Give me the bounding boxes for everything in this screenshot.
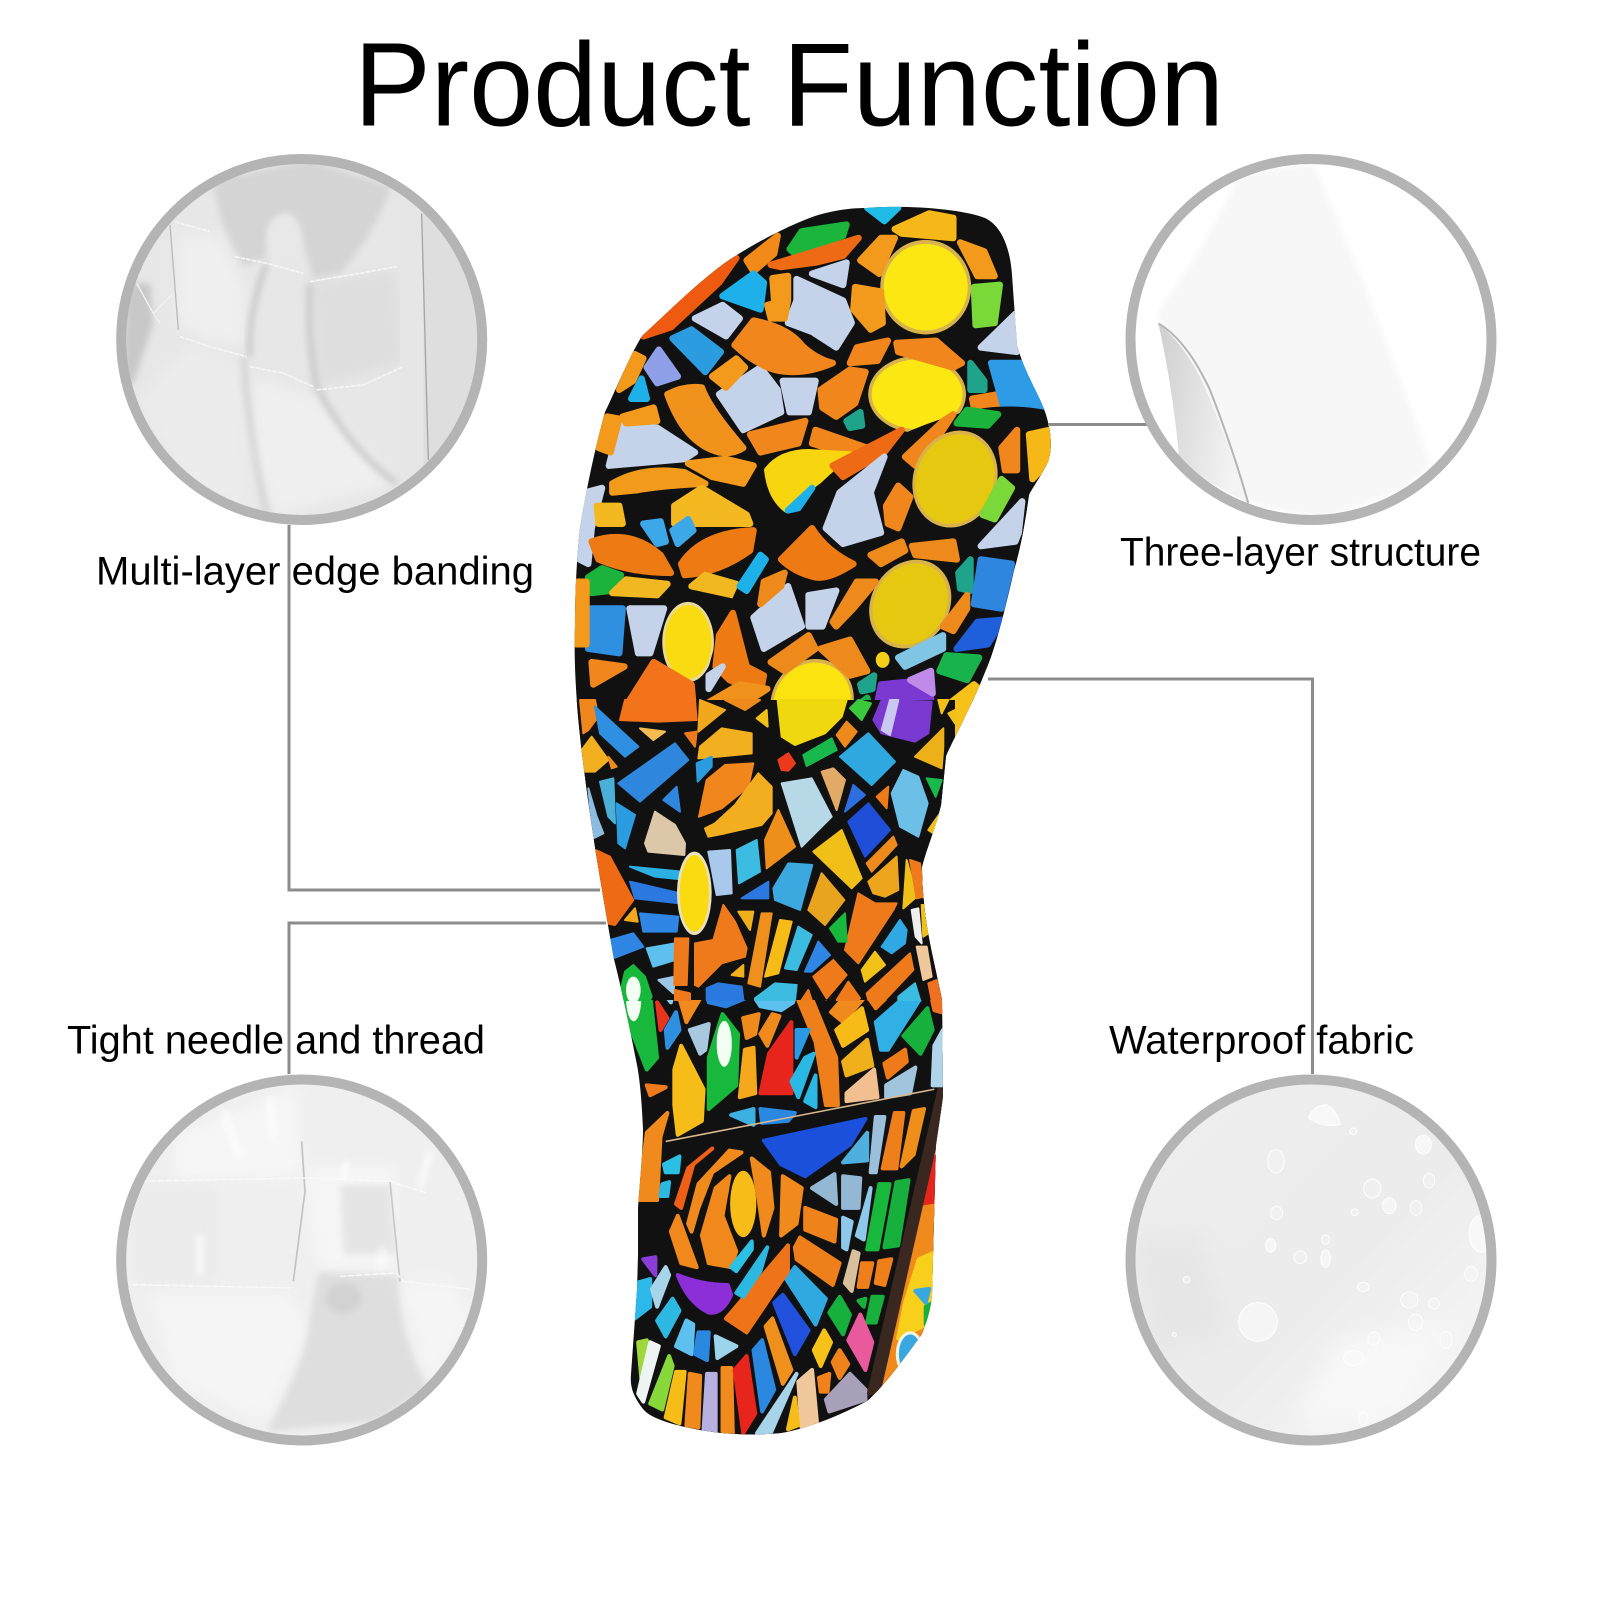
leader line: waterproof fabric bbox=[988, 679, 1312, 1074]
label: waterproof fabric: Waterproof fabric bbox=[1109, 1018, 1414, 1062]
label: tight needle and thread: Tight needle and thread bbox=[67, 1018, 485, 1062]
leader line: three-layer structure bbox=[1048, 423, 1148, 426]
right side panel beyond brown strip bbox=[934, 1097, 943, 1170]
title: Product Function bbox=[354, 18, 1224, 152]
label: multi-layer edge banding: Multi-layer edge banding bbox=[96, 550, 534, 594]
back layer panes bbox=[576, 208, 1043, 722]
label: three-layer structure: Three-layer structure bbox=[1120, 530, 1481, 574]
leader line: tight needle and thread bbox=[289, 923, 606, 1074]
front layer upper panes bbox=[702, 410, 1050, 760]
detail circle: waterproof fabric bbox=[1125, 1074, 1497, 1446]
product: stained-glass print leg garment bbox=[560, 200, 1060, 1440]
detail circle: multi-layer edge banding bbox=[116, 154, 488, 526]
garment black base bbox=[560, 200, 1060, 1440]
water drops bbox=[1172, 1105, 1494, 1425]
front layer seam panel bbox=[667, 406, 1060, 1440]
detail circle: three-layer structure bbox=[1125, 154, 1497, 526]
mid section panes bbox=[575, 700, 955, 1003]
lower section panes bbox=[621, 951, 946, 1433]
hem line bbox=[666, 1089, 934, 1141]
detail circle: tight needle and thread bbox=[116, 1074, 488, 1446]
leader line: multi-layer edge banding bbox=[289, 525, 600, 890]
